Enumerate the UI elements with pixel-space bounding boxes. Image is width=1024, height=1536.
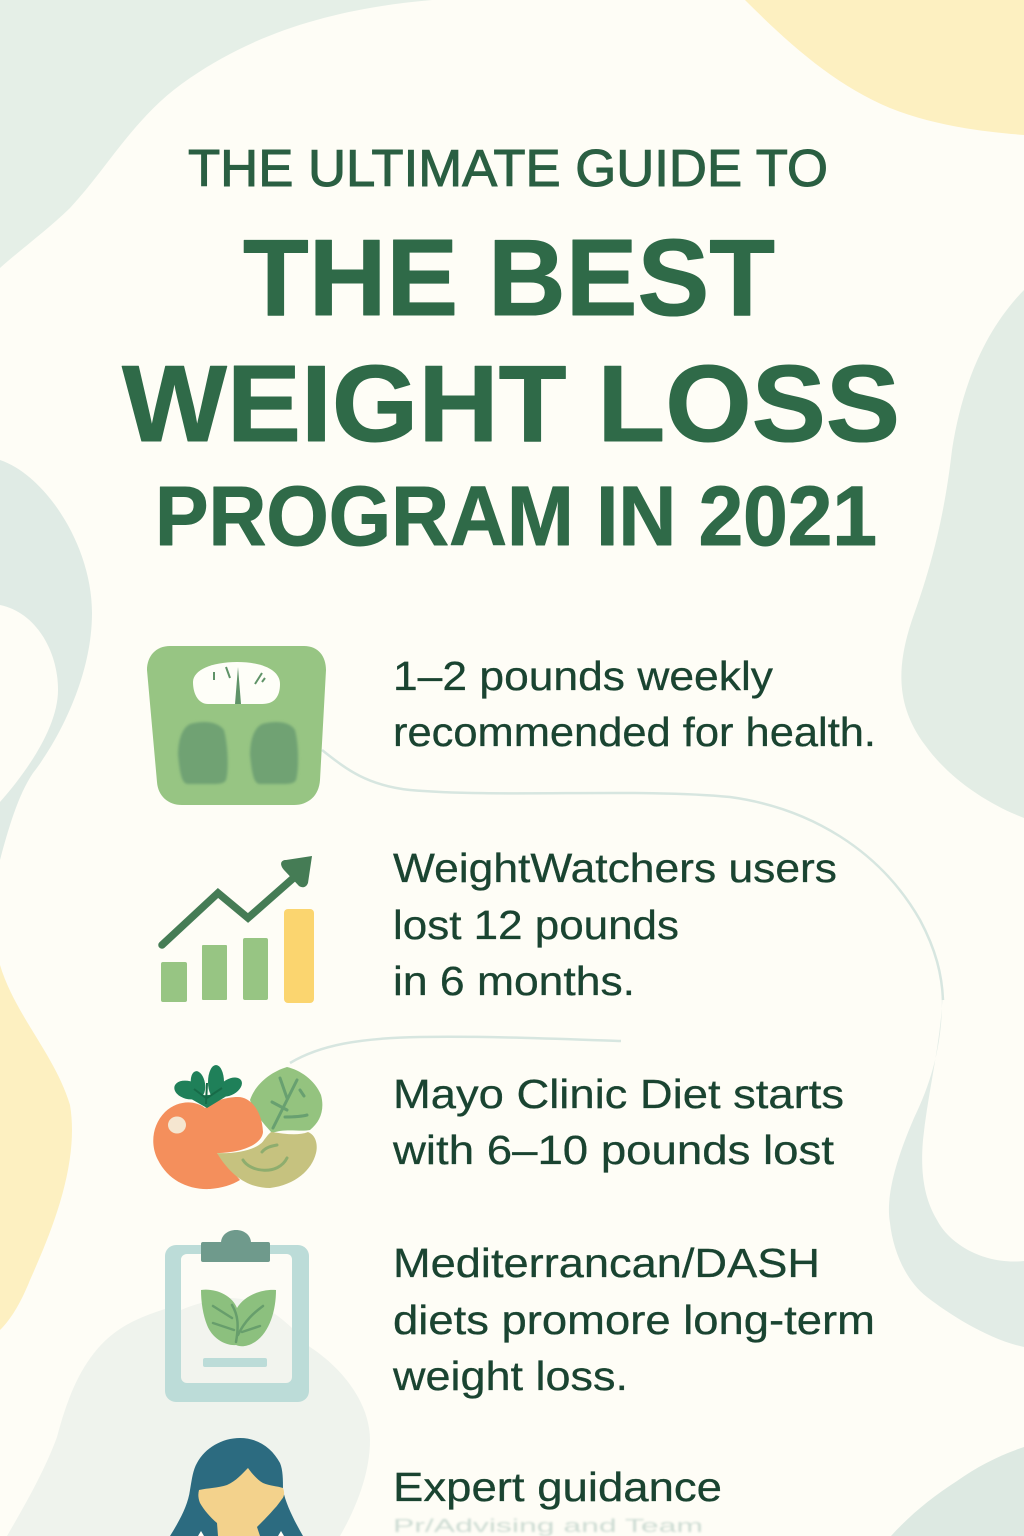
text: WeightWatchers: lost 12 pounds	[393, 902, 679, 948]
title kicker: THE ULTIMATE GUIDE TO	[188, 140, 828, 198]
text: Expert guidance: Expert guidance	[393, 1464, 722, 1510]
icon: tomato and leaves	[153, 1065, 322, 1189]
text: Mediterranean and DASH: Mediterrancan/DASH	[393, 1240, 820, 1286]
connector line: scale to chart	[322, 750, 943, 1000]
text: 1-2 pounds weekly: 1–2 pounds weekly	[393, 653, 774, 699]
text: Mediterranean and DASH: diets promore long-term	[393, 1297, 875, 1343]
text: WeightWatchers: WeightWatchers users	[393, 845, 837, 891]
title	[122, 140, 900, 563]
text: Mayo Clinic Diet	[392, 1071, 844, 1173]
faded text at bottom edge: Pr/Advising and Team	[393, 1516, 703, 1536]
text: Mayo Clinic Diet: with 6–10 pounds lost	[392, 1127, 835, 1173]
text: WeightWatchers	[393, 845, 837, 1004]
connector line: food to list	[290, 1037, 621, 1063]
icon: expert person	[170, 1438, 303, 1536]
title line: the best: THE BEST	[243, 217, 775, 339]
text: 1-2 pounds weekly	[393, 653, 876, 755]
title line: program in 2021: PROGRAM IN 2021	[155, 469, 877, 563]
icon: rising bar chart	[161, 856, 314, 1003]
icon: clipboard with leaf	[165, 1230, 309, 1402]
text: Mediterranean and DASH: weight loss.	[392, 1353, 628, 1399]
text: Mediterranean and DASH	[392, 1240, 875, 1399]
icon: bathroom scale	[147, 646, 326, 805]
text: WeightWatchers: in 6 months.	[393, 958, 635, 1004]
title line: weight loss: WEIGHT LOSS	[122, 343, 900, 465]
text: 1-2 pounds weekly: recommended for health.	[393, 709, 876, 755]
text: Mayo Clinic Diet: Mayo Clinic Diet starts	[393, 1071, 844, 1117]
